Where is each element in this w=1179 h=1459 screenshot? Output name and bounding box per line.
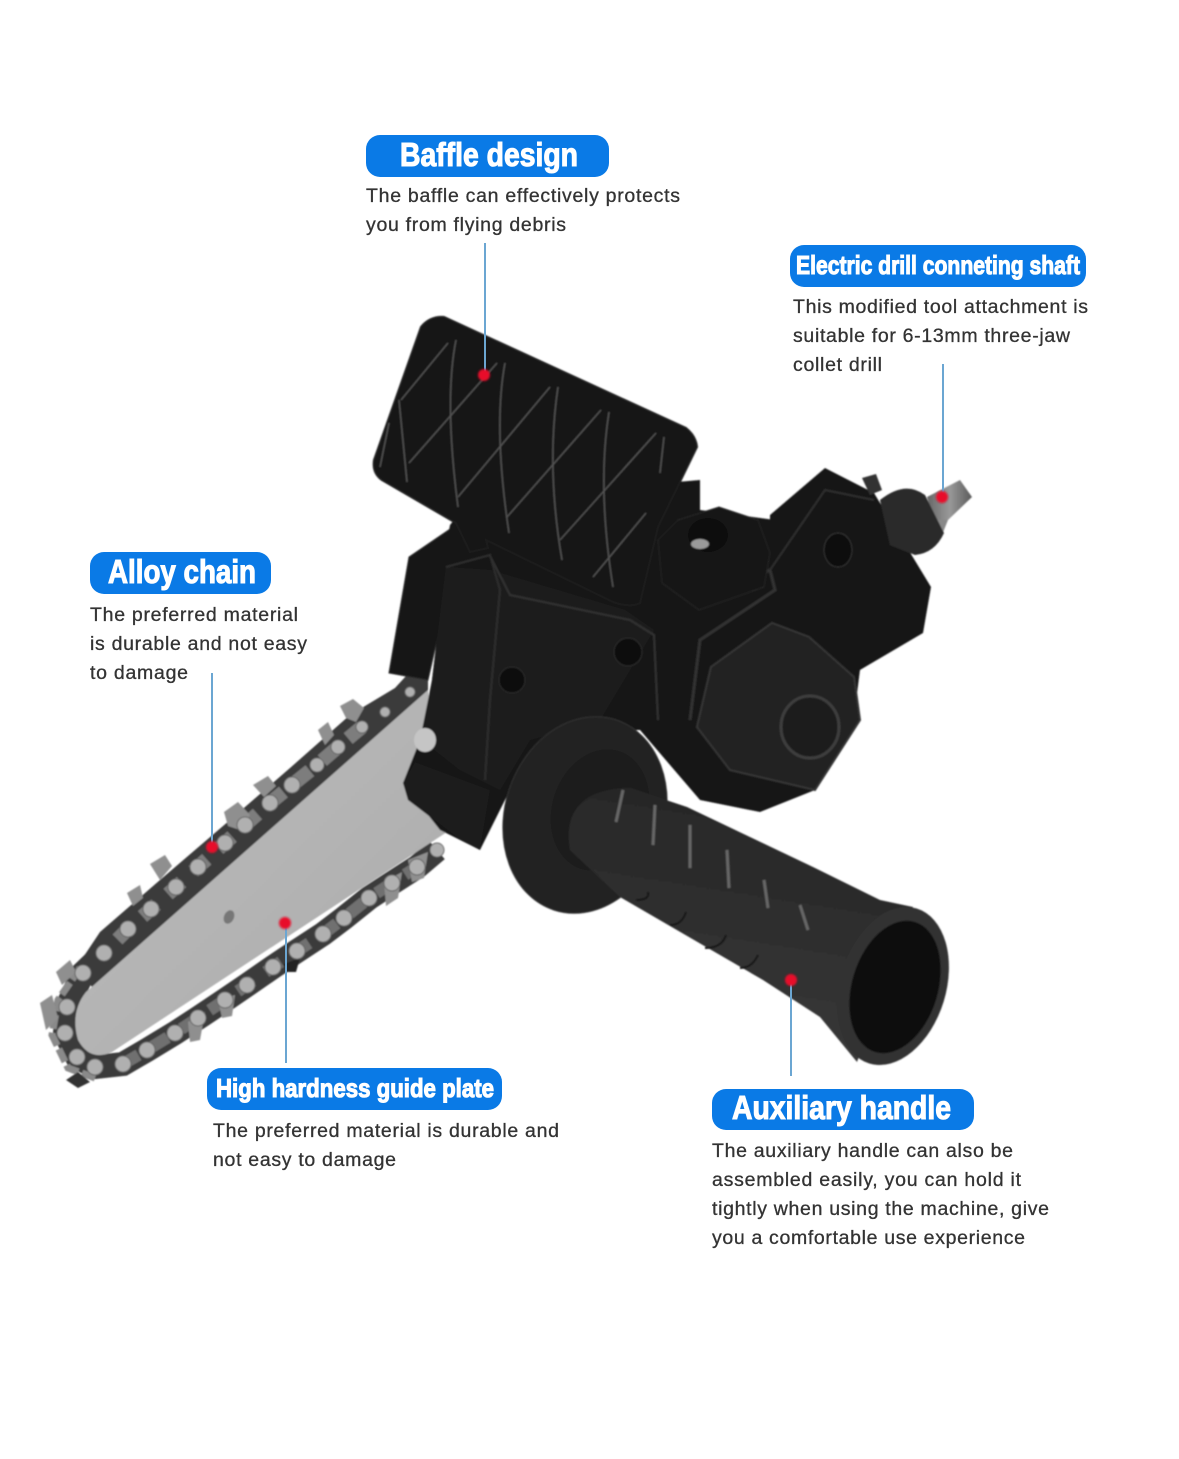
- tightening nut: [658, 507, 770, 610]
- text: chain description: [90, 604, 307, 684]
- housing screw holes: [499, 667, 525, 693]
- leader line: baffle: [478, 243, 490, 381]
- text: shaft description: [793, 296, 1088, 376]
- chain: [40, 652, 444, 1088]
- text: plate description: The preferred material is durable and: [213, 1120, 559, 1142]
- panel: baffle design: [366, 135, 680, 381]
- clamp block: [403, 762, 490, 850]
- text: handle description: The auxiliary handle can also be: [712, 1140, 1013, 1162]
- text: shaft description: This modified tool attachment is: [793, 296, 1088, 318]
- heading: electric drill conneting shaft: Electric drill conneting shaft: [796, 250, 1080, 280]
- text: baffle description: [366, 185, 680, 236]
- drill shaft: [862, 474, 972, 555]
- connecting body behind baffle: [440, 480, 775, 640]
- text: plate description: [213, 1120, 559, 1171]
- text: baffle description: you from flying debris: [366, 214, 566, 236]
- text: shaft description: collet drill: [793, 354, 882, 376]
- panel: high hardness guide plate: [207, 917, 559, 1171]
- text: handle description: you a comfortable use experience: [712, 1227, 1025, 1249]
- heading: auxiliary handle: Auxiliary handle: [732, 1089, 951, 1126]
- heading: high hardness guide plate: [207, 1068, 502, 1110]
- auxiliary handle: [478, 695, 967, 1079]
- text: baffle description: The baffle can effectively protects: [366, 185, 680, 207]
- guide plate: [75, 690, 450, 1055]
- text: chain description: is durable and not easy: [90, 633, 307, 655]
- text: chain description: The preferred material: [90, 604, 298, 626]
- chain rivets: [57, 687, 444, 1075]
- leader line: handle: [785, 974, 797, 1076]
- panel: alloy chain: [90, 552, 307, 853]
- heading: electric drill conneting shaft: [790, 245, 1086, 287]
- text: handle description: assembled easily, you can hold it: [712, 1169, 1022, 1191]
- text: plate description: not easy to damage: [213, 1149, 396, 1171]
- panel: auxiliary handle: [712, 974, 1049, 1249]
- leader line: plate: [279, 917, 291, 1063]
- leader line: shaft: [936, 364, 948, 503]
- heading: baffle design: Baffle design: [400, 136, 578, 173]
- side octagon cap: [697, 623, 860, 790]
- text: handle description: tightly when using the machine, give: [712, 1198, 1049, 1220]
- text: chain description: to damage: [90, 662, 188, 684]
- product: chainsaw attachment: [40, 317, 972, 1088]
- main housing: [403, 468, 931, 850]
- chain cutters: [40, 699, 428, 1042]
- baffle: [374, 317, 697, 605]
- heading: high hardness guide plate: High hardness guide plate: [216, 1073, 494, 1103]
- text: handle description: [712, 1140, 1049, 1249]
- back plate: [389, 525, 470, 680]
- text: shaft description: suitable for 6-13mm three-jaw: [793, 325, 1071, 347]
- heading: alloy chain: Alloy chain: [108, 553, 256, 590]
- panel: electric drill connecting shaft: [790, 245, 1088, 503]
- leader line: chain: [206, 673, 218, 853]
